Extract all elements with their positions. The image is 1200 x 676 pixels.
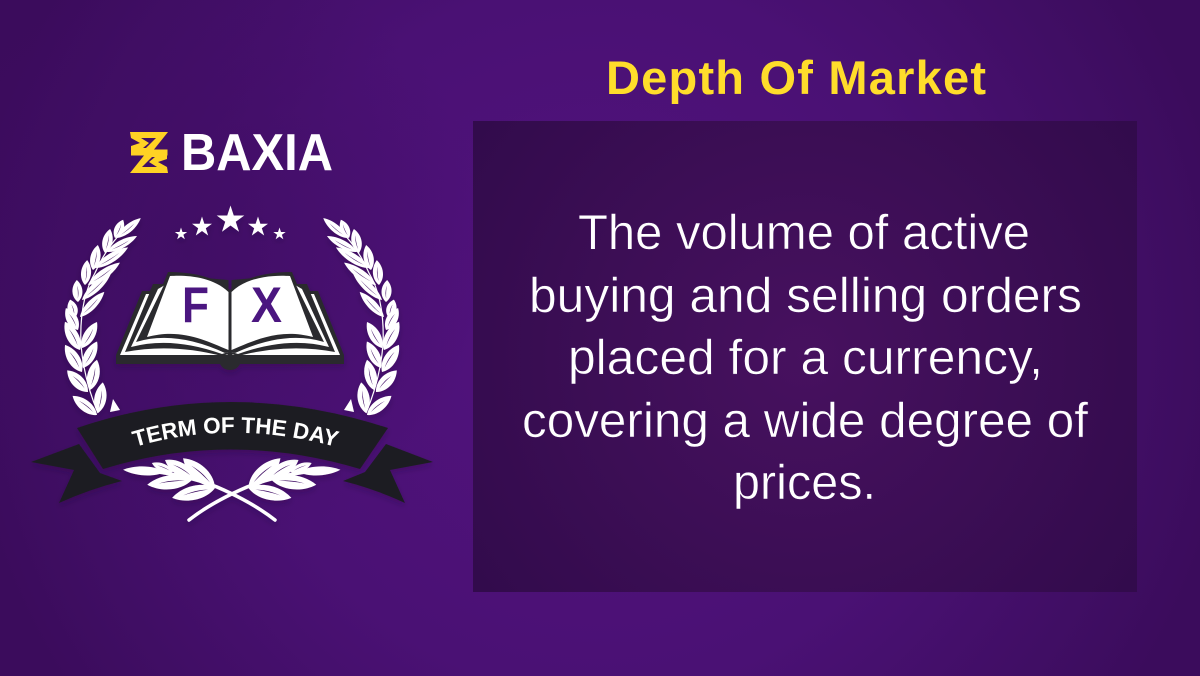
ribbon: TERM OF THE DAY	[131, 417, 340, 446]
panel: definition	[473, 121, 1137, 592]
icon: Baxia mark	[130, 132, 168, 173]
letter X: X	[251, 277, 282, 333]
definition text	[522, 206, 1088, 510]
wordmark: BAXIA	[181, 124, 333, 182]
definition text: placed for a currency,	[568, 331, 1043, 385]
ribbon text	[135, 433, 340, 448]
badge: term of the day	[31, 206, 433, 522]
definition text: covering a wide degree of	[522, 394, 1088, 448]
letter F: F	[182, 277, 209, 333]
icon: bottom laurel	[123, 453, 341, 520]
logo: Baxia	[130, 124, 333, 182]
definition text: buying and selling orders	[529, 269, 1082, 323]
title: Depth Of Market	[606, 51, 986, 104]
definition text: The volume of active	[578, 206, 1030, 260]
icon: open book	[116, 272, 344, 370]
ribbon	[31, 402, 433, 504]
icon: stars	[175, 206, 286, 239]
icon: left laurel	[60, 215, 143, 419]
definition text: prices.	[733, 456, 876, 510]
icon: right laurel	[321, 215, 404, 419]
